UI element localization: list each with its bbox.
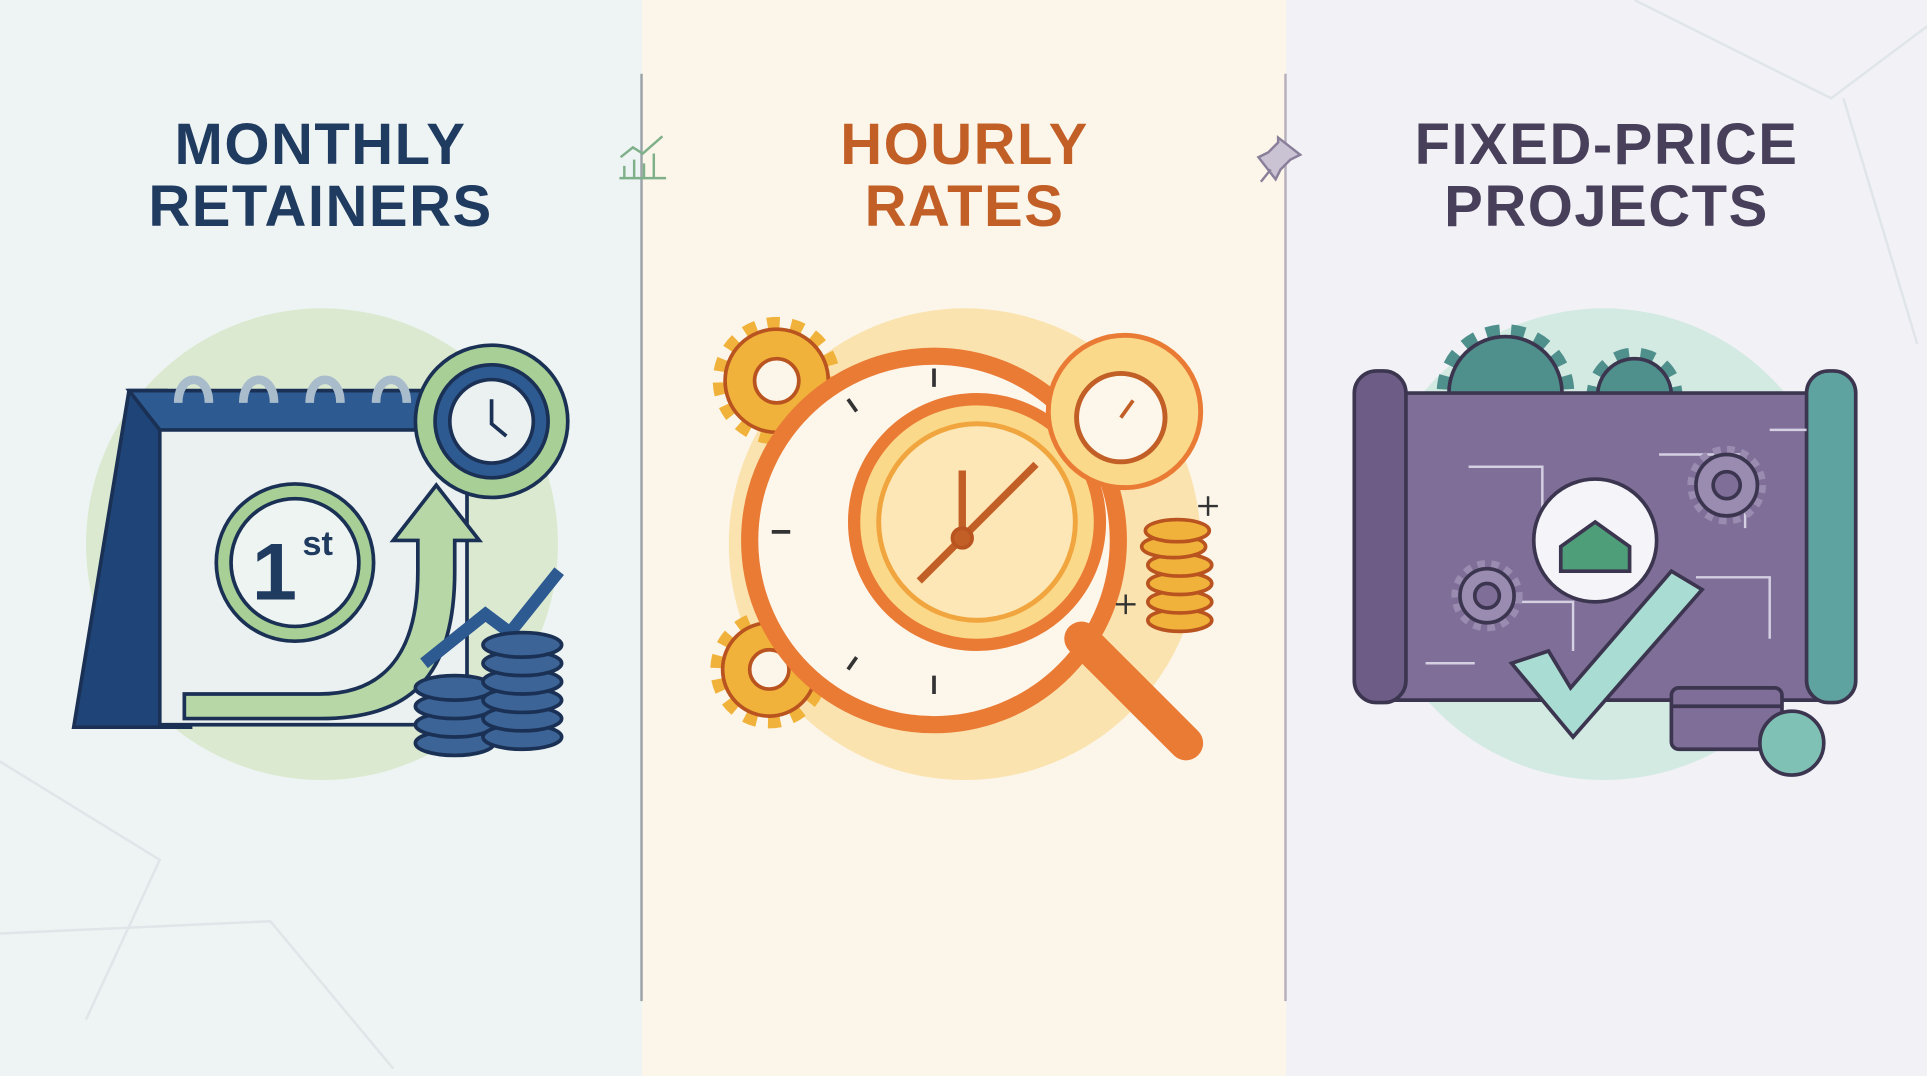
icon: small chart xyxy=(619,136,666,178)
heading: monthly retainers xyxy=(148,112,493,239)
icon: pin xyxy=(1258,138,1300,182)
heading: hourly rates xyxy=(840,112,1089,239)
illustration: calendar with coins: st xyxy=(302,525,333,563)
heading: hourly rates: HOURLY xyxy=(840,112,1089,177)
heading: fixed-price projects: PROJECTS xyxy=(1444,174,1769,239)
panel: monthly retainers background xyxy=(0,0,642,1076)
heading: monthly retainers: MONTHLY xyxy=(175,112,466,177)
illustration: magnifier clock xyxy=(718,308,1218,780)
heading: fixed-price projects xyxy=(1415,112,1798,239)
heading: hourly rates: RATES xyxy=(865,174,1064,239)
heading: monthly retainers: RETAINERS xyxy=(148,174,493,239)
panel: hourly rates background xyxy=(642,0,1286,1076)
illustration: blueprint with checkmark xyxy=(1354,308,1856,780)
illustration: calendar with coins xyxy=(74,308,568,780)
panel: fixed-price projects background xyxy=(1286,0,1927,1076)
illustration: calendar with coins: 1 xyxy=(252,527,297,617)
heading: fixed-price projects: FIXED-PRICE xyxy=(1415,112,1798,177)
